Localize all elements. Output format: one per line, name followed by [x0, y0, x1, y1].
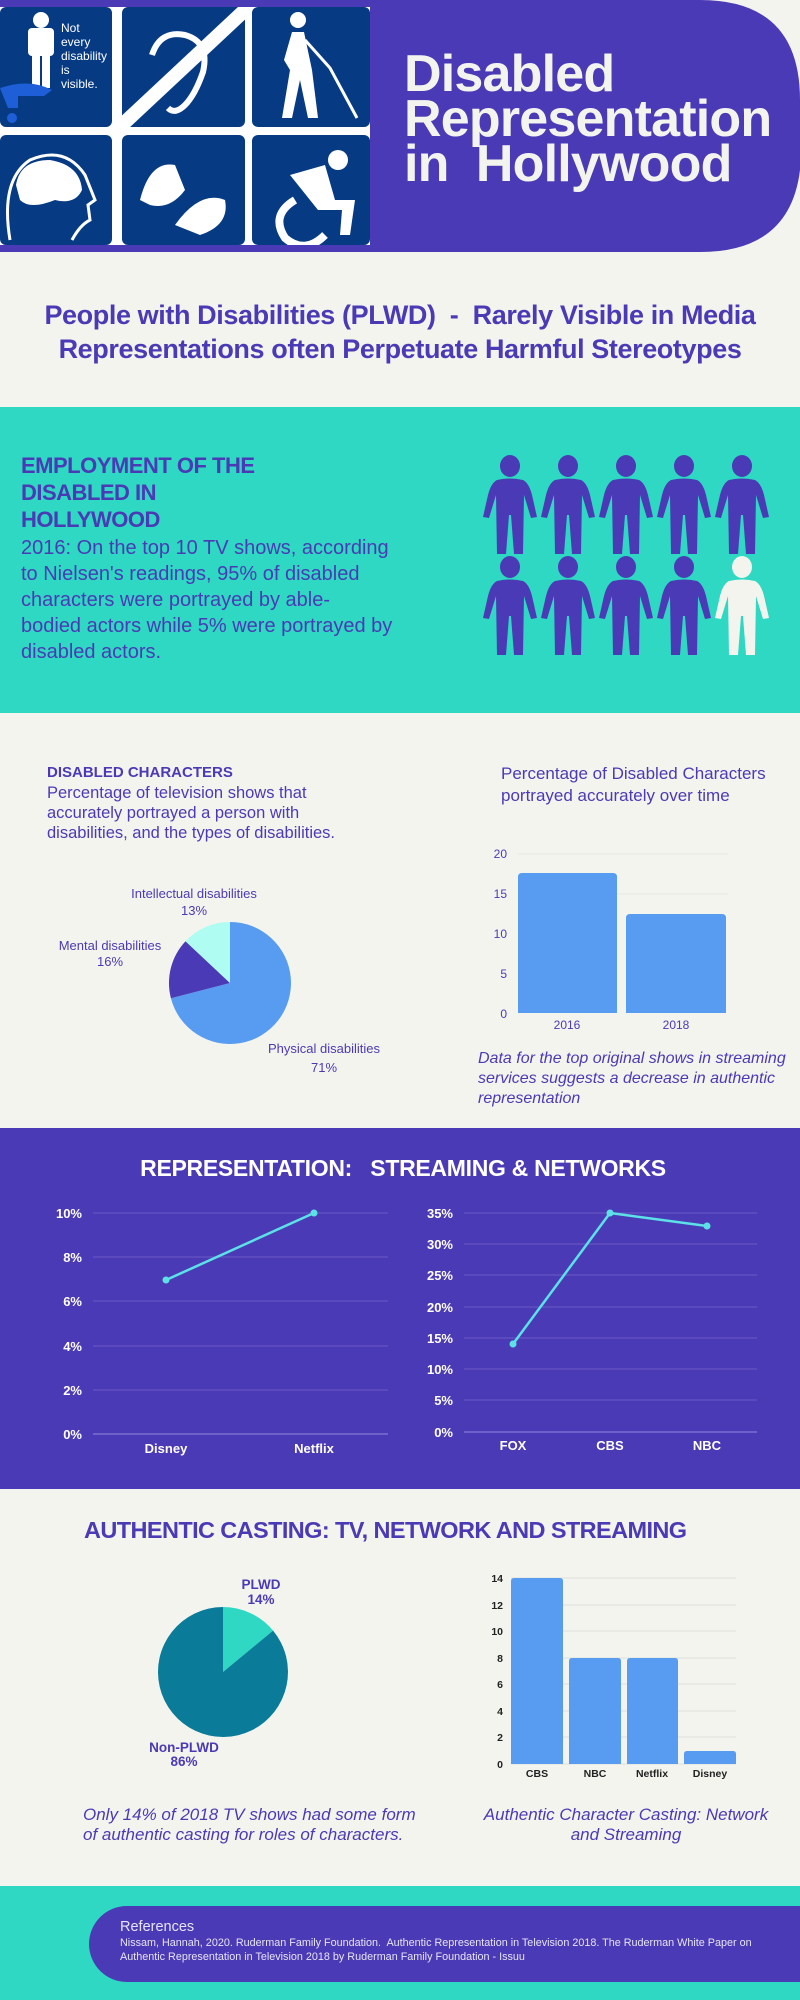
line chart: streaming: 0%: [63, 1427, 82, 1442]
pie chart: PLWD casting: 86%: [170, 1754, 198, 1769]
title: [404, 45, 771, 193]
bar chart: accuracy over time: 2018: [663, 1018, 690, 1032]
line chart: streaming: Netflix: [294, 1441, 335, 1456]
bar chart: authentic casting by network: CBS: [526, 1768, 548, 1780]
pie chart: disability types: [59, 886, 380, 1075]
bar chart: accuracy over time: 10: [494, 927, 507, 941]
bar chart: accuracy over time: [494, 847, 728, 1032]
caption: streaming decrease: Data for the top original shows in streaming services suggests a decrease in authentic representation: [478, 1050, 786, 1107]
pie chart: disability types: 16%: [97, 954, 123, 969]
heading: employment: DISABLED IN: [21, 480, 156, 505]
pie chart: disability types: Mental disabilities: [59, 938, 162, 953]
pie chart: disability types: 71%: [311, 1060, 337, 1075]
bar chart: authentic casting by network: Disney: [693, 1768, 727, 1780]
header image: disability icons: is: [61, 63, 70, 77]
bar chart: authentic casting by network: 4: [497, 1706, 503, 1718]
icon: people grid: [483, 455, 769, 655]
header image: disability icons: every: [61, 35, 90, 49]
line chart: streaming: [56, 1206, 388, 1456]
bar chart: authentic casting by network: Netflix: [636, 1768, 668, 1780]
line chart: streaming: 8%: [63, 1250, 82, 1265]
caption: bar chart: Authentic Character Casting: Network and Streaming: [484, 1805, 768, 1844]
references text: Nissam, Hannah, 2020. Ruderman Family Foundation. Authentic Representation in Television 2018. The Ruderman White Paper on Authentic Representation in Television 2018 by Ruderman Family Foundation - Issuu: [120, 1937, 752, 1963]
panel: representation streaming & networks: [0, 1128, 800, 1489]
line chart: streaming: 10%: [56, 1206, 82, 1221]
line chart: networks: 10%: [427, 1362, 453, 1377]
bar chart: accuracy over time: 0: [500, 1007, 507, 1021]
header image: disability icons: disability: [61, 49, 107, 63]
header image: disability icons: visible.: [61, 77, 98, 91]
line chart: networks: 30%: [427, 1237, 453, 1252]
references pill: [89, 1906, 800, 1982]
line chart: networks: 35%: [427, 1206, 453, 1221]
line chart: networks: 0%: [434, 1425, 453, 1440]
panel: authentic casting: [83, 1517, 769, 1844]
panel: disabled characters: [47, 764, 786, 1107]
heading: employment: EMPLOYMENT OF THE: [21, 453, 254, 478]
subtitle: People with Disabilities (PLWD) - Rarely Visible in Media: [44, 300, 756, 330]
bar chart: accuracy over time: 15: [494, 887, 507, 901]
subtitle: [44, 300, 756, 364]
bar chart: accuracy over time: 2016: [554, 1018, 581, 1032]
panel: employment: [0, 407, 800, 713]
heading: bar chart title: Percentage of Disabled Characters portrayed accurately over time: [501, 764, 766, 805]
line chart: networks: CBS: [596, 1438, 624, 1453]
line chart: streaming: Disney: [145, 1441, 188, 1456]
heading: employment: HOLLYWOOD: [21, 507, 160, 532]
bar chart: authentic casting by network: 10: [491, 1626, 503, 1638]
line chart: networks: 25%: [427, 1268, 453, 1283]
bar chart: authentic casting by network: 14: [491, 1573, 503, 1585]
bar chart: authentic casting by network: [491, 1573, 736, 1780]
title: Representation: [404, 90, 771, 148]
heading: authentic casting: AUTHENTIC CASTING: TV, NETWORK AND STREAMING: [84, 1517, 686, 1543]
bar chart: authentic casting by network: NBC: [584, 1768, 607, 1780]
line chart: networks: 20%: [427, 1300, 453, 1315]
footer: [0, 1886, 800, 2000]
text block: employment stats: bodied actors while 5% were portrayed by disabled actors.: [21, 615, 392, 663]
header image: disability icons: [0, 7, 370, 245]
heading: employment: [21, 453, 254, 532]
line chart: networks: [427, 1206, 757, 1453]
pie chart: PLWD casting: PLWD: [242, 1577, 281, 1592]
pie chart: disability types: Physical disabilities: [268, 1041, 380, 1056]
bar chart: authentic casting by network: 0: [497, 1759, 503, 1771]
bar chart: authentic casting by network: 12: [491, 1600, 503, 1612]
line chart: networks: 15%: [427, 1331, 453, 1346]
heading: disabled characters: DISABLED CHARACTERS: [47, 764, 233, 781]
title: in Hollywood: [404, 135, 732, 193]
header image: disability icons: Not: [61, 21, 80, 35]
line chart: networks: FOX: [500, 1438, 527, 1453]
bar chart: authentic casting by network: 6: [497, 1679, 503, 1691]
text block: description: Percentage of television shows that accurately portrayed a person with disabilities, and the types of disabilities.: [47, 784, 335, 842]
pie chart: disability types: Intellectual disabilities: [131, 886, 257, 901]
bar chart: accuracy over time: 5: [500, 967, 507, 981]
line chart: networks: NBC: [693, 1438, 722, 1453]
text block: employment stats: 2016: On the top 10 TV shows, according to Nielsen's readings, 95% of disabled characters were portrayed by able-: [21, 537, 389, 611]
title: Disabled: [404, 45, 614, 103]
pie chart: disability types: 13%: [181, 903, 207, 918]
header band: [0, 0, 800, 252]
subtitle: Representations often Perpetuate Harmful Stereotypes: [59, 334, 741, 364]
pie chart: PLWD casting: 14%: [247, 1592, 275, 1607]
caption: 14% authentic casting: Only 14% of 2018 TV shows had some form of authentic casting for roles of characters.: [83, 1805, 416, 1844]
pie chart: PLWD casting: Non-PLWD: [149, 1740, 219, 1755]
references text: [120, 1919, 752, 1963]
bar chart: accuracy over time: 20: [494, 847, 507, 861]
line chart: streaming: 6%: [63, 1294, 82, 1309]
pie chart: PLWD casting: [149, 1577, 288, 1769]
line chart: streaming: 4%: [63, 1339, 82, 1354]
line chart: streaming: 2%: [63, 1383, 82, 1398]
text block: employment stats: [21, 537, 392, 663]
bar chart: authentic casting by network: 2: [497, 1732, 503, 1744]
references text: References: [120, 1919, 194, 1935]
line chart: networks: 5%: [434, 1393, 453, 1408]
heading: representation: REPRESENTATION: STREAMING & NETWORKS: [140, 1155, 666, 1181]
bar chart: authentic casting by network: 8: [497, 1653, 503, 1665]
